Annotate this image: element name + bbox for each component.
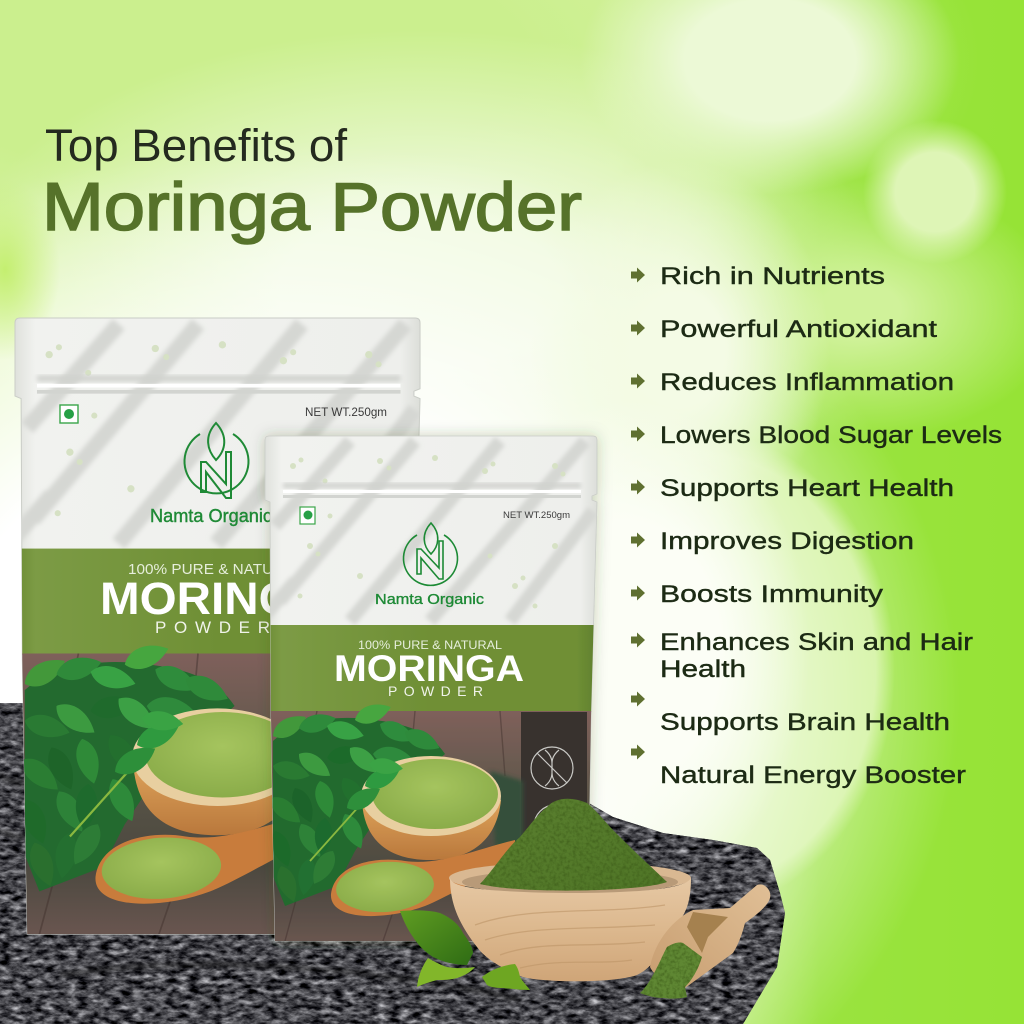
wooden bowl with moringa powder [449,799,691,981]
scoop inner [687,912,728,953]
benefit 3: Reduces Inflammation [660,369,954,396]
benefits list [631,263,1002,789]
benefit 9: Supports Brain Health [660,709,950,736]
wood grain [475,905,665,968]
large pouch [9,318,420,937]
brand logo [184,423,248,498]
net weight: NET WT.250gm [503,510,570,521]
veg mark [300,507,315,524]
title line: moringa powder: Moringa Powder [42,169,582,245]
net weight: NET WT.250gm [305,407,387,419]
tree stump [0,700,800,1024]
small pouch labels [300,507,570,699]
benefit 6: Improves Digestion [660,528,914,555]
title [42,120,582,245]
big leaf [400,910,473,965]
small pouch [260,436,597,943]
benefit 7: Boosts Immunity [660,581,883,608]
green leaves [400,910,530,990]
benefit 10: Natural Energy Booster [660,762,966,789]
powder label: POWDER [388,683,483,699]
pure and natural line: 100% PURE & NATURAL [358,638,502,652]
bowl body [450,878,691,981]
bowl back rim [449,862,691,894]
brand logo [403,523,458,585]
powder label: POWDER [155,618,270,637]
brand name: Namta Organic [150,506,272,526]
benefit 2: Powerful Antioxidant [660,316,937,343]
right small leaf [482,964,530,990]
veg mark [60,405,78,423]
benefit 8: Health [660,656,746,683]
scoop powder [640,942,702,999]
pure and natural line: 100% PURE & NATURAL [128,561,303,578]
left small leaf [417,958,475,987]
benefit 8 [660,629,973,683]
scoop body [650,884,770,988]
small pouch artwork [260,436,597,943]
wooden scoop [640,884,770,999]
benefit 8: Enhances Skin and Hair [660,629,973,656]
benefit 1: Rich in Nutrients [660,263,885,290]
benefit 5: Supports Heart Health [660,475,954,502]
title line: top benefits: Top Benefits of [45,120,348,171]
large pouch artwork [9,318,420,937]
bowl inner [462,870,678,894]
bullet icons [631,268,645,760]
benefit 4: Lowers Blood Sugar Levels [660,422,1002,449]
large pouch labels [60,405,387,637]
moringa label: MORINGA [334,648,524,689]
moringa label: MORINGA [100,573,330,624]
brand name: Namta Organic [375,592,484,608]
powder mound [480,799,667,891]
